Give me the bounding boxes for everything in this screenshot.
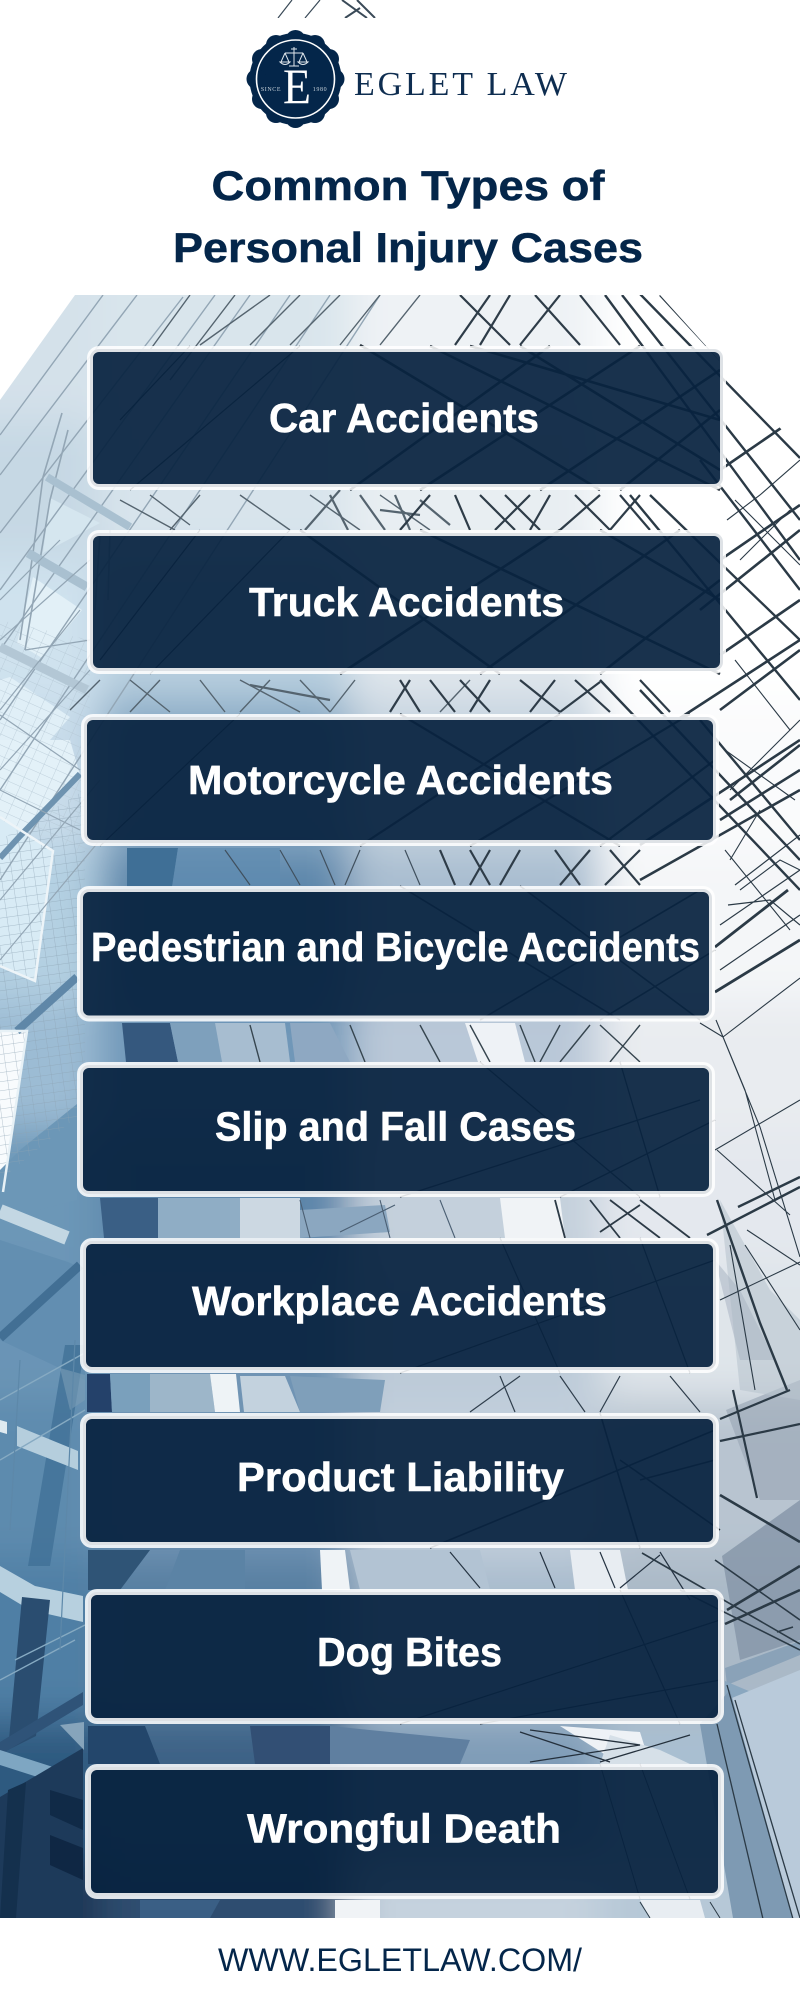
panel: product liability: Product Liability (237, 1454, 564, 1500)
icon: wax seal (246, 30, 344, 128)
icon: wax seal: E (283, 58, 311, 114)
panel: pedestrian and bicycle accidents: Pedestrian and Bicycle Accidents (91, 924, 700, 970)
panel: truck accidents: Truck Accidents (249, 579, 564, 625)
panel: workplace accidents (83, 1241, 716, 1370)
icon: wax seal: 1980 (313, 87, 327, 93)
panel: wrongful death: Wrongful Death (247, 1806, 561, 1852)
panel: slip and fall cases (80, 1065, 712, 1194)
title: Personal Injury Cases (173, 224, 643, 271)
glass panes, left margin (0, 498, 100, 1918)
panel: motorcycle accidents (84, 717, 716, 843)
title: Common Types of (212, 162, 606, 209)
panel: slip and fall cases: Slip and Fall Cases (215, 1104, 576, 1150)
icon: scales of justice (281, 47, 307, 66)
panel: car accidents (90, 349, 723, 487)
title (173, 162, 643, 271)
panel: dog bites: Dog Bites (317, 1629, 502, 1675)
dark gap lattice lines, centre (70, 295, 700, 1762)
logo wordmark: EGLET LAW (354, 66, 568, 103)
panel: truck accidents (90, 533, 723, 671)
wire frame behind the case boxes (100, 345, 720, 1899)
top building fragment (278, 0, 375, 18)
logo: Eglet Law (246, 30, 568, 128)
pale lattice lines, left margin (0, 295, 380, 1680)
panel: motorcycle accidents: Motorcycle Accidents (188, 757, 613, 803)
right side panels (700, 1200, 800, 1918)
colour panels in gaps between the case boxes (87, 848, 705, 1918)
dark wire frame, right margin (600, 294, 800, 1919)
panel: pedestrian and bicycle accidents (80, 889, 712, 1018)
panel: product liability (83, 1416, 716, 1545)
icon: wax seal: SINCE (261, 87, 281, 93)
panel: workplace accidents: Workplace Accidents (192, 1278, 607, 1324)
fine lattice texture, left margin (0, 790, 85, 1180)
panel: dog bites (88, 1592, 721, 1721)
panel: wrongful death (88, 1767, 721, 1896)
footer url: WWW.EGLETLAW.COM/ (218, 1942, 582, 1978)
panel: car accidents: Car Accidents (269, 395, 539, 441)
